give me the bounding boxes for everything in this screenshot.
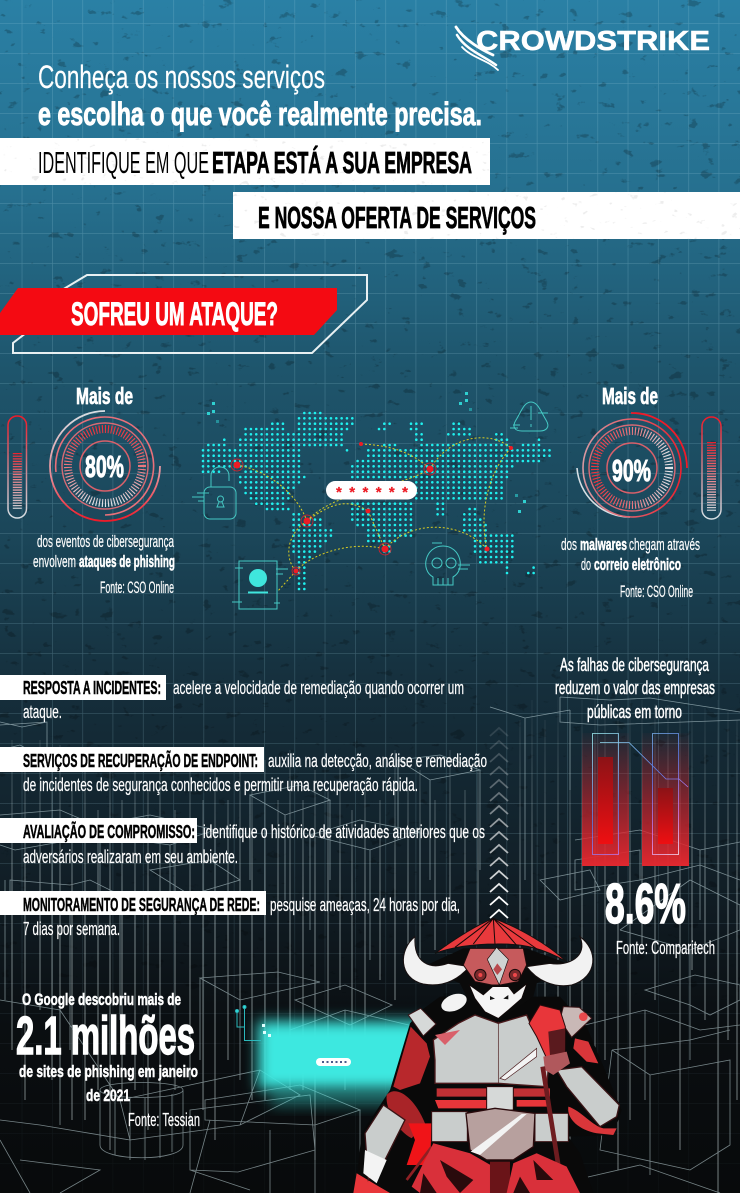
right shoulder plate bbox=[560, 1007, 592, 1037]
helmet face bbox=[463, 948, 527, 985]
title: e escolha o que você realmente precisa. bbox=[38, 96, 482, 132]
logo: CrowdStrike bbox=[456, 25, 710, 70]
service: avaliação de compromisso bbox=[0, 818, 485, 867]
icon: passport document bbox=[232, 561, 288, 609]
service: monitoramento de rede bbox=[0, 891, 460, 939]
service: recuperação de endpoint bbox=[0, 747, 487, 795]
helmet crest oval bbox=[439, 990, 469, 1015]
service: recuperação de endpoint: auxilia na detecção, análise e remediação bbox=[268, 751, 487, 771]
stat: 80 percent: dos eventos de cibersegurança bbox=[37, 532, 174, 551]
stat: 90 percent: malwares bbox=[580, 535, 627, 554]
hat bbox=[435, 918, 567, 962]
fist bbox=[529, 1005, 565, 1058]
service: avaliação de compromisso: AVALIAÇÃO DE COMPROMISSO: bbox=[23, 821, 195, 842]
bull eyes bbox=[475, 969, 521, 981]
stat: 2.1 milhões: de 2021 bbox=[86, 1086, 130, 1105]
service: recuperação de endpoint: SERVIÇOS DE RECUPERAÇÃO DE ENDPOINT: bbox=[23, 750, 258, 771]
stat: 80 percent: Fonte: CSO Online bbox=[100, 578, 174, 597]
banner: identifique: ETAPA ESTÁ A SUA EMPRESA bbox=[212, 145, 472, 180]
wireframe city background bbox=[0, 690, 740, 1193]
world map dots bbox=[203, 392, 550, 592]
stat: 90 percent: do bbox=[581, 555, 591, 574]
stat: 8.6 percent bbox=[555, 655, 715, 958]
icon: falcon swoosh bbox=[456, 27, 498, 70]
map pixel clusters bbox=[207, 392, 526, 513]
stat: 90 percent: correio eletrônico bbox=[594, 555, 681, 574]
chevrons pointing up bbox=[490, 728, 508, 918]
thermometer gauge right bbox=[702, 417, 721, 519]
ring gauge right bbox=[577, 413, 687, 517]
mascot: samurai bull bbox=[353, 918, 622, 1193]
left horn bbox=[403, 937, 469, 985]
icon: open padlock bbox=[192, 467, 236, 519]
stat: 80 percent: Mais de bbox=[76, 383, 133, 409]
ring gauge left bbox=[50, 411, 160, 521]
stat: 90 percent: dos bbox=[561, 535, 577, 554]
icon: warning triangle bbox=[510, 402, 548, 431]
legs bbox=[412, 1143, 580, 1193]
stat: 80 percent: envolvem bbox=[33, 552, 76, 571]
stat: 2.1 milhões: O Google descobriu mais de bbox=[22, 990, 181, 1009]
banner: oferta de serviços: E NOSSA OFERTA DE SERVIÇOS bbox=[258, 200, 536, 235]
service: monitoramento de rede: pesquise ameaças, 24 horas por dia, bbox=[270, 895, 460, 915]
hood under hat bbox=[423, 948, 572, 1020]
password pill small bbox=[316, 1058, 351, 1066]
service: resposta a incidentes bbox=[0, 675, 464, 722]
banner: identifique bbox=[0, 138, 490, 185]
stat: 2.1 milhões: de sites de phishing em janeiro bbox=[19, 1062, 198, 1081]
arms and sleeves bbox=[353, 1027, 617, 1193]
title bbox=[38, 59, 482, 132]
stat: 2.1 milhões: Fonte: Tessian bbox=[128, 1110, 200, 1130]
chest marking bbox=[435, 1030, 460, 1045]
logo: CrowdStrike: CROWDSTRIKE bbox=[476, 25, 710, 56]
right horn bbox=[527, 937, 593, 986]
left shoulder plate bbox=[408, 1008, 436, 1036]
attack routes bbox=[237, 438, 511, 592]
service: recuperação de endpoint: de incidentes de segurança conhecidos e permitir uma recuperação rápida. bbox=[23, 775, 418, 795]
service: monitoramento de rede: MONITORAMENTO DE SEGURANÇA DE REDE: bbox=[23, 895, 260, 915]
stat: 90 percent bbox=[561, 383, 721, 601]
chest armor bbox=[433, 1015, 550, 1087]
service: resposta a incidentes: acelere a velocidade de remediação quando ocorrer um bbox=[173, 678, 464, 698]
title: Conheça os nossos serviços bbox=[38, 59, 325, 95]
white mask bbox=[469, 984, 527, 1018]
pixel marks bbox=[262, 1024, 271, 1037]
stat: 8.6 percent: públicas em torno bbox=[587, 702, 682, 722]
ring gauge left: 80% bbox=[85, 449, 124, 484]
ring gauge right: 90% bbox=[612, 453, 651, 488]
forearm armor bbox=[557, 1067, 619, 1127]
password pill: ****** bbox=[336, 484, 408, 501]
icon: skull bbox=[426, 543, 470, 585]
service: avaliação de compromisso: identifique o histórico de atividades anteriores que os bbox=[203, 822, 485, 842]
thermometer gauge left bbox=[8, 416, 26, 518]
password pill bbox=[326, 481, 417, 501]
service: resposta a incidentes: RESPOSTA A INCIDENTES: bbox=[23, 678, 161, 698]
stat: 2.1 milhões: 2.1 milhões bbox=[16, 1006, 195, 1066]
stat: 80 percent bbox=[8, 383, 175, 597]
stat: 80 percent: ataques de phishing bbox=[79, 552, 175, 571]
bar chart bbox=[582, 733, 689, 866]
cyan screen panel bbox=[236, 1006, 478, 1106]
heading: sofreu um ataque: SOFREU UM ATAQUE? bbox=[71, 296, 278, 332]
belt and waist bbox=[432, 1087, 568, 1142]
stat: 2.1 milhões bbox=[16, 990, 200, 1130]
service: resposta a incidentes: ataque. bbox=[23, 702, 62, 722]
circuit lines bbox=[236, 1006, 261, 1040]
banner: identifique: IDENTIFIQUE EM QUE bbox=[38, 145, 209, 180]
stat: 8.6 percent: 8.6% bbox=[605, 872, 686, 936]
body silhouette bbox=[355, 997, 622, 1193]
waist plate bbox=[466, 1108, 535, 1160]
staff bbox=[543, 1067, 563, 1193]
heading: sofreu um ataque bbox=[0, 275, 367, 353]
stat: 90 percent: Mais de bbox=[602, 383, 658, 409]
attack nodes bbox=[231, 442, 513, 575]
left arm guard bbox=[365, 1105, 405, 1180]
service: avaliação de compromisso: adversários realizaram em seu ambiente. bbox=[23, 847, 238, 867]
service: monitoramento de rede: 7 dias por semana. bbox=[23, 919, 120, 939]
